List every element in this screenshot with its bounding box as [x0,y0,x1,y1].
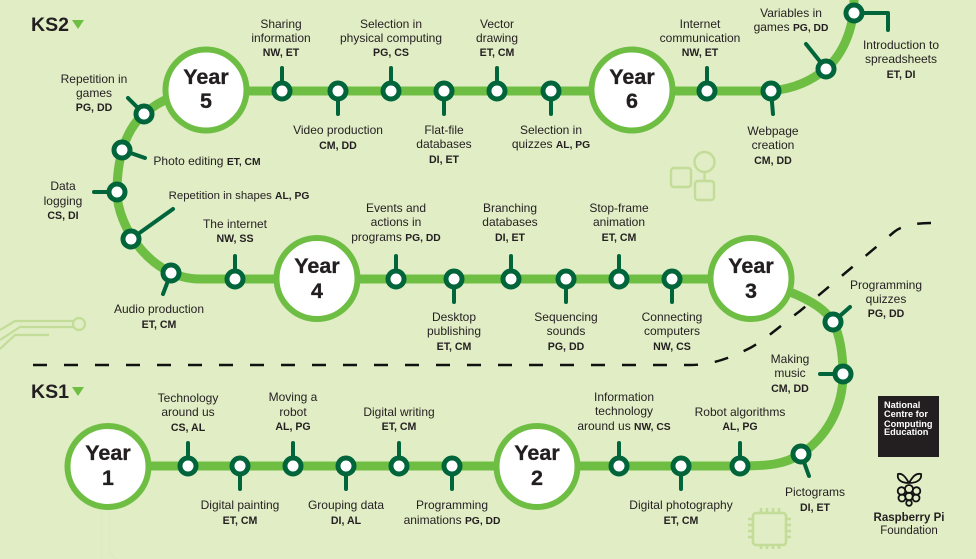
stop: Video production: Video production [293,123,383,137]
stop: Pictograms: Pictograms [785,485,845,499]
decorative icon: circuit lines [0,318,85,349]
green track [108,0,854,466]
stop: Repetition in games: games [76,86,112,100]
stop: Webpage creation [747,83,799,167]
stop: The internet: NW, SS [216,233,254,245]
stop: Making music: music [774,366,806,380]
stop: Digital painting [201,458,279,527]
stop: Variables in games: games PG, DD [754,20,828,34]
stop: Grouping data [308,458,384,527]
stop: Introduction to spreadsheets [846,5,939,81]
stop: Events and actions in programs: Events and [366,201,426,215]
stop: Programming quizzes: Programming [850,278,922,292]
stop: Stop-frame animation: animation [593,215,645,229]
stop: Video production: CM, DD [319,140,357,152]
stop: Desktop publishing: publishing [427,324,481,338]
stop: Selection in physical computing: physical computing [340,31,442,45]
stop: Branching databases [482,201,538,287]
stop: Sharing information: NW, ET [263,47,300,59]
stop: Sharing information: information [251,31,311,45]
stop: Making music: Making [771,352,809,366]
stop: Technology around us: CS, AL [171,422,206,434]
decorative icon: flowchart [671,152,714,200]
logo: Raspberry Pi icon [898,474,921,506]
stop: Technology around us [158,391,218,474]
stop: Robot algorithms: AL, PG [722,421,758,433]
stop: Audio production [114,265,204,331]
stop: Audio production: Audio production [114,302,204,316]
KS2 heading: KS2 [31,14,69,36]
stop: Webpage creation: CM, DD [754,155,792,167]
stop: Repetition in shapes [123,190,309,247]
logo: National Centre for Computing Education: National [884,400,920,410]
stop: Programming quizzes: quizzes [866,292,906,306]
Year 6 badge: Year [609,65,655,89]
stop: Vector drawing: Vector [480,17,514,31]
stop: Robot algorithms [695,405,785,474]
stop: Data logging: logging [44,194,82,208]
Year 4 badge [276,238,358,319]
stop: Video production [293,83,383,152]
stop: Programming quizzes: PG, DD [868,308,905,320]
stop: Vector drawing [476,17,518,99]
stop: Digital painting: Digital painting [201,498,279,512]
stop: Data logging: CS, DI [47,210,79,222]
stop: Digital photography [629,458,733,527]
stop: Selection in physical computing: PG, CS [373,47,409,59]
stop: Sequencing sounds: PG, DD [548,341,585,353]
stop: Repetition in games [61,72,152,122]
KS1 heading: KS1 [31,381,69,403]
stop: Information technology around us: technology [595,404,653,418]
Year 2 badge [496,426,578,507]
decorative icon: faint circuit under Year 1 [101,510,116,559]
stop: Robot algorithms: Robot algorithms [695,405,785,419]
logo text: Raspberry Pi Foundation: Raspberry Pi [874,512,944,524]
stop: Internet communication: communication [660,31,740,45]
stop: Desktop publishing: Desktop [432,310,476,324]
stop: Vector drawing: ET, CM [480,47,515,59]
stop: Digital painting: ET, CM [223,515,258,527]
stop: Repetition in games: Repetition in [61,72,127,86]
stop: Digital photography: Digital photography [629,498,733,512]
logo text: Raspberry Pi Foundation [874,512,944,537]
stop: Connecting computers: computers [644,324,700,338]
stop: Digital writing [363,405,435,474]
stop: Selection in physical computing [340,17,442,99]
stop: Webpage creation: creation [752,138,794,152]
stop: Sequencing sounds: sounds [547,324,585,338]
stop: Selection in quizzes [512,83,590,151]
logo text: Raspberry Pi Foundation: Foundation [880,525,938,537]
stop: Technology around us: around us [161,405,215,419]
stop: Events and actions in programs: actions in [371,215,421,229]
stop: Moving a robot: robot [279,405,307,419]
stop: Webpage creation: Webpage [747,124,799,138]
stop: Photo editing: Photo editing ET, CM [153,154,261,168]
stop: Making music [771,352,851,395]
stop: Stop-frame animation: Stop-frame [589,201,649,215]
stop: Digital writing: ET, CM [382,421,417,433]
Year 5 badge: Year [183,65,229,89]
Year 6 badge: 6 [626,89,638,113]
stop: Sequencing sounds: Sequencing [534,310,598,324]
stop: Desktop publishing: ET, CM [437,341,472,353]
stop: Flat-file databases: Flat-file [424,123,464,137]
Year 3 badge [710,238,792,319]
stop: Sharing information: Sharing [260,17,302,31]
stop: Sharing information [251,17,311,99]
stop: Flat-file databases: databases [416,137,472,151]
stop: Moving a robot: AL, PG [275,421,311,433]
stop: The internet: The internet [203,217,268,231]
Year 3 badge: Year [728,254,774,278]
Year 5 badge [166,50,246,130]
stop: Flat-file databases [416,83,472,166]
stop: Introduction to spreadsheets: Introduction to [863,38,939,52]
stop: Programming quizzes [825,278,922,330]
Year 1 badge: 1 [102,466,114,490]
stop: Information technology around us [577,390,671,474]
stop: Audio production: ET, CM [142,319,177,331]
stop: Stop-frame animation: ET, CM [602,232,637,244]
stop: Internet communication: Internet [680,17,721,31]
stop: Variables in games [754,6,834,77]
stop: Connecting computers: NW, CS [653,341,691,353]
stop: Moving a robot [269,390,318,474]
logo: National Centre for Computing Education [878,396,939,457]
stop: Grouping data: DI, AL [331,515,362,527]
Year 4 badge: 4 [311,279,323,303]
Year 2 badge: Year [514,441,560,465]
stop: Branching databases: Branching [483,201,537,215]
stop: Data logging [44,179,125,222]
stop: Data logging: Data [50,179,76,193]
stop: Branching databases: DI, ET [495,232,526,244]
stop: Grouping data: Grouping data [308,498,384,512]
Year 6 badge [592,50,672,130]
stop: The internet [203,217,268,287]
Year 4 badge: Year [294,254,340,278]
Year 1 badge: Year [85,441,131,465]
stop: Digital writing: Digital writing [363,405,435,419]
logo: National Centre for Computing Education: Computing [884,419,932,429]
stop: Repetition in shapes: Repetition in shapes AL, PG [169,190,309,202]
stop: Programming animations [404,458,500,527]
Year 1 badge [68,426,148,507]
Year 2 badge: 2 [531,466,543,490]
logo: National Centre for Computing Education: Education [884,427,929,437]
stop: Information technology around us: Information [594,390,654,404]
stop: Events and actions in programs [351,201,441,287]
stop: Programming animations: animations PG, DD [404,513,500,527]
stop: Events and actions in programs: programs PG, DD [351,230,441,244]
stop: Branching databases: databases [482,215,538,229]
stop: Selection in physical computing: Selection in [360,17,422,31]
stop: Repetition in games: PG, DD [76,102,113,114]
stop: Internet communication: NW, ET [682,47,719,59]
stop: Making music: CM, DD [771,383,809,395]
stop: Variables in games: Variables in [760,6,822,20]
stop: Sequencing sounds [534,271,598,353]
decorative icon: microchip [748,508,791,549]
stop: Pictograms [785,446,845,514]
stop: Selection in quizzes: quizzes AL, PG [512,137,590,151]
stop: Connecting computers: Connecting [642,310,702,324]
stop: Programming animations: Programming [416,498,488,512]
stop: Introduction to spreadsheets: ET, DI [887,69,915,81]
stop: Photo editing [114,142,261,168]
stop: Technology around us: Technology [158,391,218,405]
stop: Stop-frame animation [589,201,649,287]
stop: Connecting computers [642,271,702,353]
stop: Moving a robot: Moving a [269,390,318,404]
KS divider dashed line [33,223,931,365]
stop: Desktop publishing [427,271,481,353]
stop: Digital photography: ET, CM [664,515,699,527]
stop: Pictograms: DI, ET [800,502,831,514]
logo: National Centre for Computing Education: Centre for [884,409,928,419]
stop: Vector drawing: drawing [476,31,518,45]
stop: Selection in quizzes: Selection in [520,123,582,137]
stop: Internet communication [660,17,740,99]
Year 5 badge: 5 [200,89,212,113]
Year 3 badge: 3 [745,279,757,303]
stop: Introduction to spreadsheets: spreadsheets [865,52,937,66]
stop: Information technology around us: around us NW, CS [577,419,671,433]
stop: Flat-file databases: DI, ET [429,154,460,166]
